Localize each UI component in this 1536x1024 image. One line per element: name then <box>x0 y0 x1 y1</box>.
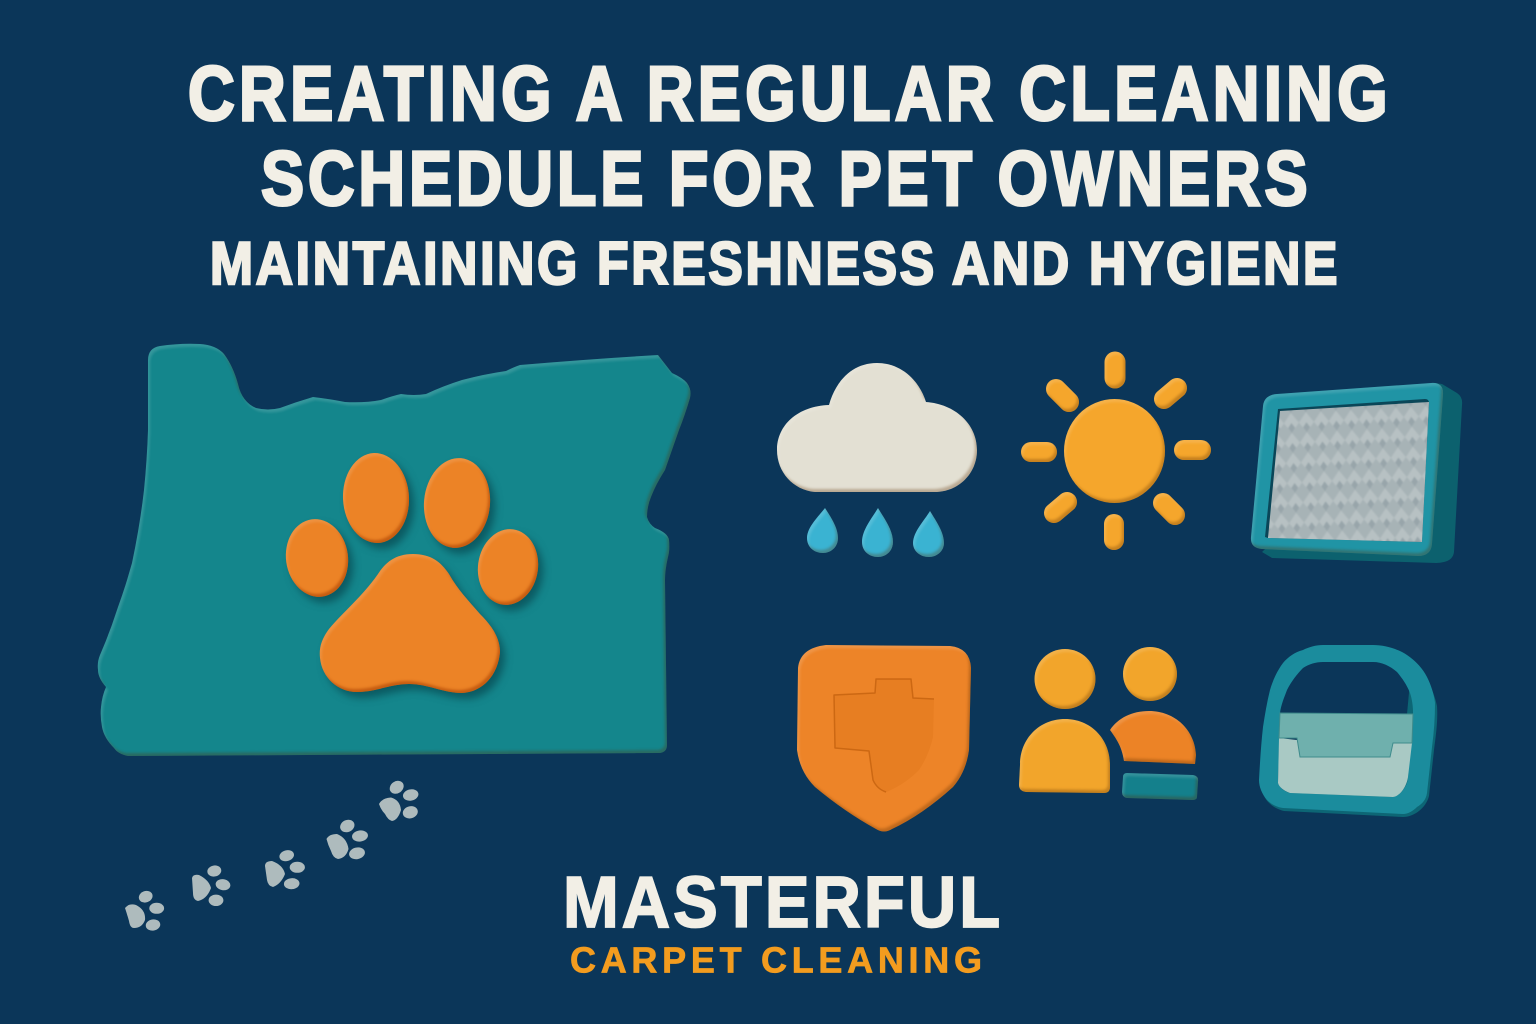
person 2 head <box>1123 647 1177 701</box>
small paw 3 <box>265 849 305 890</box>
person 2 body <box>1110 711 1196 764</box>
toe 4 <box>473 525 543 609</box>
box upper band <box>1279 713 1413 757</box>
title line 2: SCHEDULE FOR PET OWNERS <box>261 137 1308 222</box>
filter frame <box>1251 383 1443 556</box>
sun disc <box>1064 399 1165 503</box>
icon: litter box <box>1259 645 1437 817</box>
shield inner emblem <box>834 679 934 792</box>
map of Oregon with paw <box>98 344 691 756</box>
shield body <box>797 645 971 832</box>
Oregon state shape <box>98 344 691 756</box>
filter inner shadow <box>1265 399 1429 542</box>
box ring <box>1259 645 1435 814</box>
icon: rain cloud <box>777 363 977 557</box>
raindrops <box>807 508 944 557</box>
filter side depth <box>1262 383 1462 563</box>
small paw 1 <box>125 889 164 932</box>
small paw 4 <box>326 817 369 861</box>
box ring shadow <box>1262 660 1437 817</box>
icon: shield <box>797 645 971 832</box>
box lower basin <box>1278 738 1412 797</box>
toe 2 <box>420 455 494 551</box>
sun rays <box>1031 362 1201 540</box>
logo <box>563 862 1000 980</box>
person 1 body <box>1019 719 1110 793</box>
paw trail <box>125 778 419 932</box>
large paw print <box>281 451 543 693</box>
base bar <box>1122 773 1198 800</box>
icon: people <box>1019 647 1198 800</box>
brand name: MASTERFUL <box>563 862 1000 943</box>
cloud <box>777 363 977 492</box>
toe 1 <box>341 451 411 545</box>
brand tagline: CARPET CLEANING <box>570 940 982 980</box>
shield emblem edge <box>834 679 934 792</box>
person 1 head <box>1034 649 1096 709</box>
filter mesh <box>1268 402 1429 542</box>
icon: air filter <box>1251 383 1462 563</box>
small paw 2 <box>192 864 231 906</box>
main pad <box>320 554 500 693</box>
subtitle: MAINTAINING FRESHNESS AND HYGIENE <box>210 229 1337 297</box>
toe 3 <box>281 515 353 601</box>
small paw 5 <box>379 778 419 821</box>
icon: sun <box>1031 362 1201 540</box>
title <box>188 52 1388 297</box>
title line 1: CREATING A REGULAR CLEANING <box>188 52 1388 137</box>
